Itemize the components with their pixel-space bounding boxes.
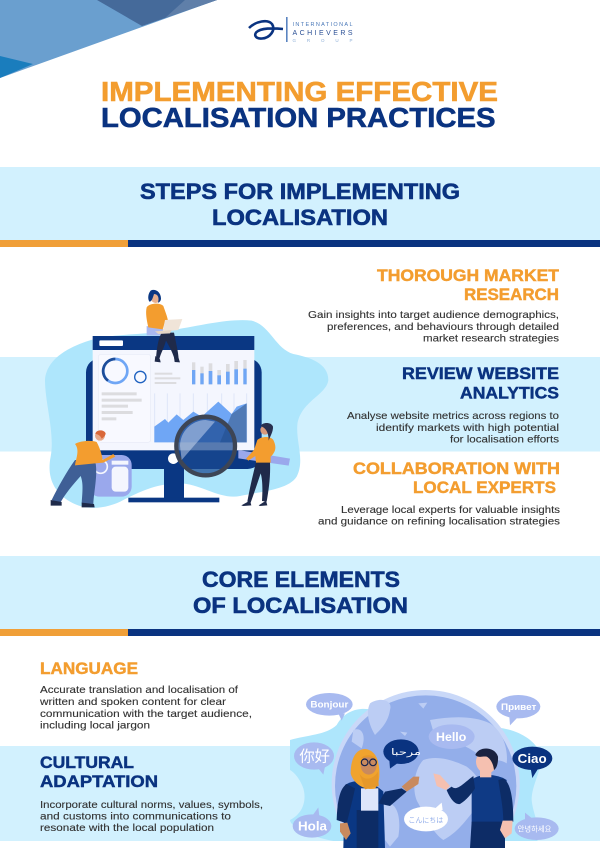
step 2: review website analytics: for localisation efforts (450, 434, 559, 446)
element: language: including local jargon (40, 720, 150, 732)
decorative header triangles (0, 0, 217, 78)
element: cultural adaptation: resonate with the local population (40, 823, 214, 834)
illustration: analytics dashboard monitor with people (45, 290, 328, 508)
person: woman in hijab (337, 749, 419, 848)
title: LOCALISATION PRACTICES (101, 102, 496, 133)
speech bubble: Hola (293, 807, 331, 838)
logo: International Achievers Group: GROUP (292, 38, 352, 43)
speech bubble: Hola: Hola (298, 820, 328, 834)
dashboard left panel with donut charts (98, 354, 151, 442)
speech bubble: Arabic greeting: مرحبا (391, 748, 421, 758)
step 3: collaboration with local experts: Leverage local experts for valuable insights (341, 505, 560, 516)
panel: steps heading band (0, 167, 600, 247)
monitor (86, 336, 262, 502)
heading: steps for implementing localisation: LOCALISATION (212, 205, 388, 230)
step 1: thorough market research: Gain insights into target audience demographics, (308, 310, 559, 321)
element: cultural adaptation: CULTURAL (40, 754, 134, 772)
person: man pushing icon (51, 430, 132, 507)
panel band: cultural adaptation background (0, 746, 600, 841)
step 1: thorough market research (308, 267, 559, 344)
bar chart (155, 360, 247, 384)
step 2: review website analytics: identify markets with high potential (376, 423, 559, 434)
magnifying glass (176, 417, 235, 475)
logo: International Achievers Group: ACHIEVERS (292, 30, 353, 37)
illustration: globe with two people and multilingual speech bubbles (290, 690, 559, 848)
heading: steps for implementing localisation (140, 179, 460, 230)
step 2: review website analytics: REVIEW WEBSITE (402, 365, 559, 383)
person: man in navy sweater (433, 748, 513, 848)
element: language: LANGUAGE (40, 660, 138, 678)
speech bubble: Bonjour: Bonjour (310, 700, 349, 710)
speech bubble: こんにちは (404, 803, 448, 831)
background blob (290, 709, 541, 841)
step 1: thorough market research: market research strategies (423, 334, 559, 344)
step 1: thorough market research: RESEARCH (464, 286, 559, 304)
element: language: written and spoken content for clear (39, 697, 227, 708)
step 3: collaboration with local experts (318, 460, 560, 528)
step 2: review website analytics: Analyse website metrics across regions to (347, 411, 559, 422)
step 1: thorough market research: preferences, and behaviours through detailed (327, 322, 559, 333)
speech bubble: Hello: Hello (436, 730, 466, 744)
element: language: Accurate translation and localisation of (40, 685, 238, 696)
step 2: review website analytics: ANALYTICS (460, 384, 559, 402)
heading: core elements of localisation: OF LOCALISATION (193, 593, 408, 618)
speech bubble: 안녕하세요: 안녕하세요 (518, 823, 552, 834)
speech bubble: Привет (496, 695, 540, 725)
step 3: collaboration with local experts: COLLABORATION WITH (353, 460, 560, 478)
element: language (39, 660, 252, 732)
panel band: review website analytics background (0, 357, 600, 452)
speech bubble: Ciao: Ciao (518, 752, 547, 766)
panel: core elements heading band (0, 556, 600, 636)
title: IMPLEMENTING EFFECTIVE (101, 76, 498, 107)
logo: International Achievers Group: INTERNATIONAL (292, 22, 352, 28)
speech bubble: Arabic greeting (383, 739, 421, 769)
person: woman holding magnifying glass (238, 423, 290, 506)
heading: core elements of localisation (193, 567, 408, 618)
element: cultural adaptation: Incorporate cultural norms, values, symbols, (40, 800, 263, 811)
speech bubble: Ciao (512, 747, 552, 778)
background blob (45, 320, 328, 508)
speech bubble: 안녕하세요 (515, 813, 559, 840)
speech bubble: Bonjour (306, 693, 353, 721)
title (101, 76, 498, 133)
globe (332, 690, 520, 848)
speech bubble: 你好: 你好 (299, 745, 330, 767)
element: cultural adaptation (40, 754, 263, 834)
speech bubble: 你好 (294, 742, 334, 775)
heading: core elements of localisation: CORE ELEMENTS (202, 567, 400, 592)
speech bubble: Привет: Привет (501, 702, 537, 712)
speech bubble: こんにちは: こんにちは (408, 815, 443, 825)
step 1: thorough market research: THOROUGH MARKET (377, 267, 559, 285)
step 3: collaboration with local experts: and guidance on refining localisation strategies (318, 516, 560, 528)
heading: steps for implementing localisation: STEPS FOR IMPLEMENTING (140, 179, 460, 204)
step 3: collaboration with local experts: LOCAL EXPERTS (413, 479, 556, 497)
logo: International Achievers Group (249, 17, 353, 43)
element: language: communication with the target audience, (40, 709, 252, 720)
element: cultural adaptation: and customs into communications to (40, 812, 231, 822)
speech bubble: Hello (429, 724, 475, 749)
area chart (154, 393, 247, 442)
element: cultural adaptation: ADAPTATION (40, 773, 158, 791)
person: woman with laptop on monitor (146, 290, 182, 362)
step 2: review website analytics (347, 365, 559, 446)
